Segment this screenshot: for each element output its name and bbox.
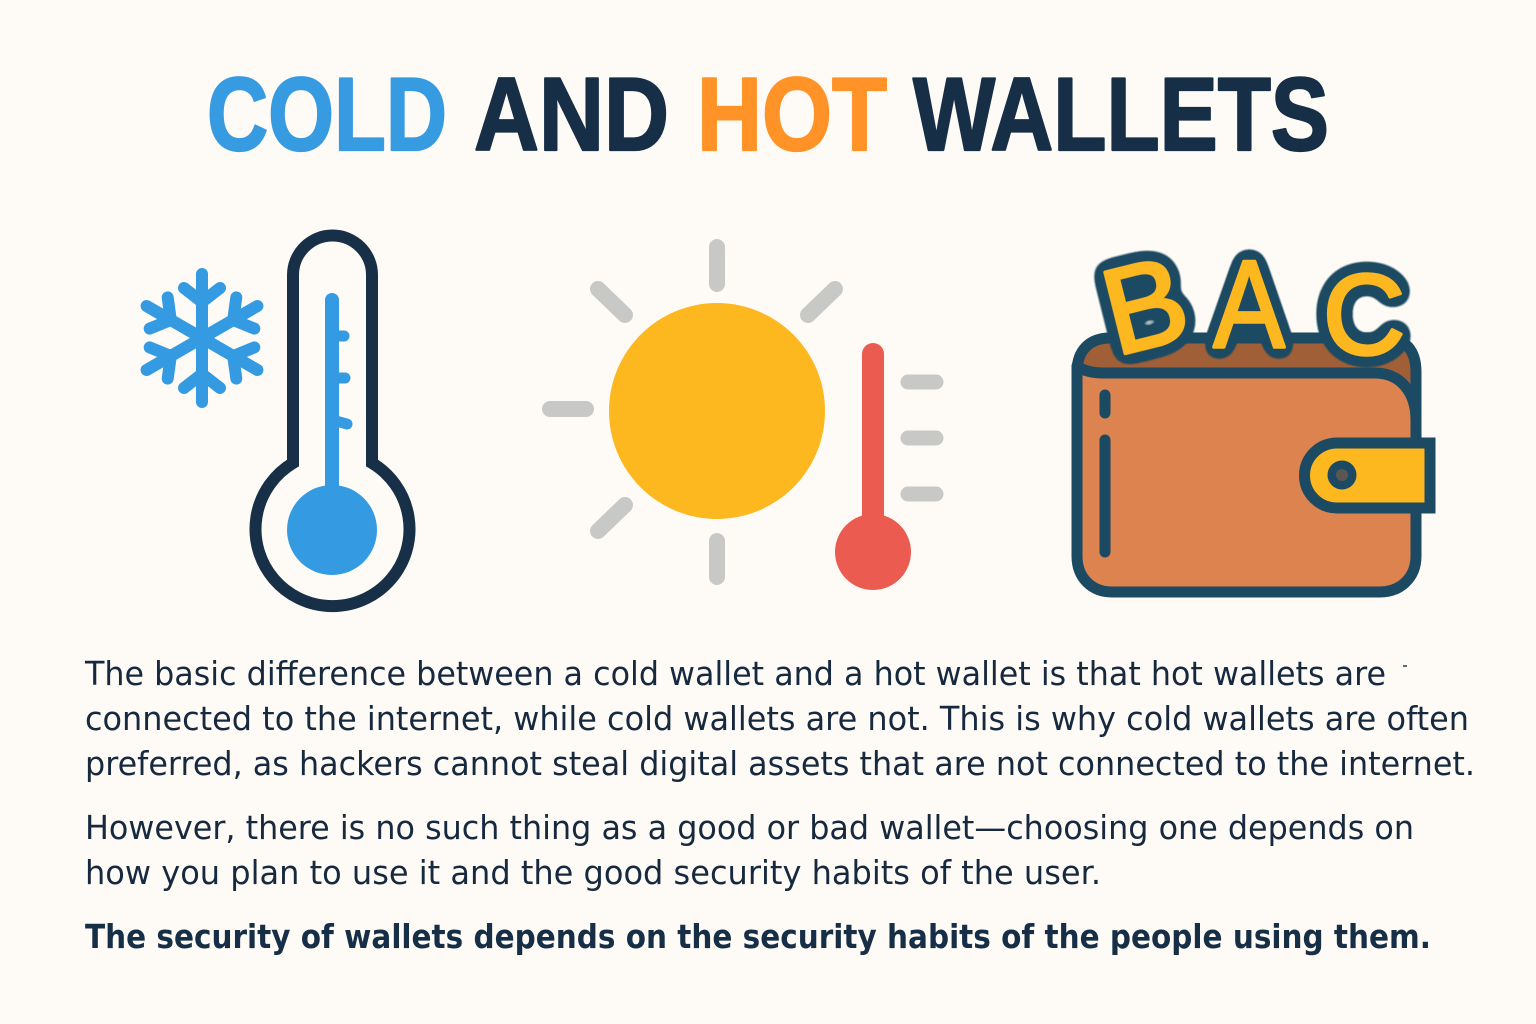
title: AND	[474, 57, 669, 173]
letter C: C	[1323, 252, 1405, 379]
body text: paragraph 2: how you plan to use it and the good security habits of the user.	[85, 853, 1101, 892]
body text: paragraph 2: However, there is no such thing as a good or bad wallet—choosing one depends on	[85, 808, 1414, 847]
body text: paragraph 1: preferred, as hackers cannot steal digital assets that are not connected to the internet.	[85, 744, 1475, 783]
wallet clasp	[1304, 443, 1430, 508]
icon: cold thermometer with snowflake	[138, 236, 410, 606]
body text: paragraph 2	[85, 808, 1414, 892]
icon: thermometer outline	[256, 236, 410, 606]
stray tick	[1403, 665, 1407, 667]
body text: paragraph 1: The basic difference between a cold wallet and a hot wallet is that hot wallets are	[84, 654, 1386, 693]
wallet stitching	[1100, 395, 1110, 552]
title: HOT	[697, 57, 887, 173]
icon: wallet with letters	[1077, 229, 1430, 592]
wallet interior	[1077, 338, 1416, 430]
letter A: A	[1213, 234, 1285, 374]
icon: sun disc	[609, 303, 825, 519]
letter B: B	[1089, 229, 1201, 381]
icon: thermometer mercury	[287, 300, 377, 575]
title	[207, 57, 1329, 173]
icon: red thermometer	[835, 343, 911, 590]
title: WALLETS	[913, 57, 1329, 173]
wallet front	[1077, 366, 1416, 592]
body text: paragraph 1	[84, 654, 1475, 783]
body text: paragraph 1: connected to the internet, while cold wallets are not. This is why cold wallets are often	[85, 699, 1469, 738]
icon: snowflake	[138, 274, 266, 402]
icon: sun rays	[550, 247, 835, 577]
icon: sun with hot thermometer	[550, 247, 936, 590]
icon: thermometer ticks	[908, 382, 936, 494]
title: COLD	[207, 57, 447, 173]
